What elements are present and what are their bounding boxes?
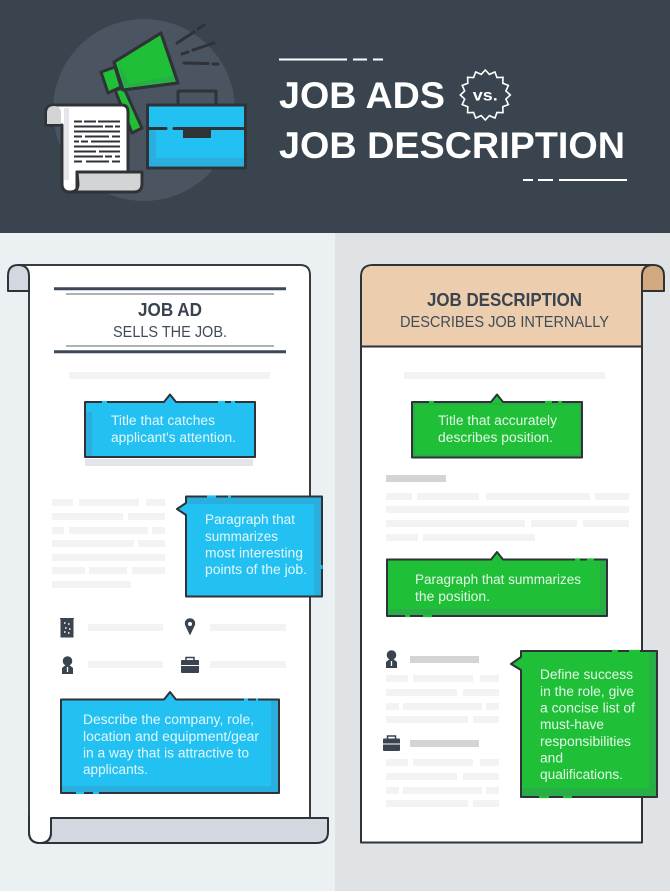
callout: success definition: Define success <box>540 667 633 682</box>
title line 1: JOB ADS <box>279 75 445 116</box>
icon: briefcase <box>148 91 246 168</box>
placeholder paragraph <box>386 475 629 541</box>
scroll sheet <box>361 265 654 842</box>
callout: description: in a way that is attractive to <box>83 746 249 760</box>
header illustration <box>46 19 246 201</box>
callout: title: Title that accurately <box>438 413 557 428</box>
callout: title: applicant's attention. <box>111 430 236 445</box>
header band <box>0 0 670 233</box>
callout: paragraph: points of the job. <box>205 562 307 577</box>
placeholder paragraph <box>52 499 165 588</box>
heading: job ad <box>54 289 286 352</box>
callout: success definition: must-have <box>540 717 604 732</box>
heading: job description: DESCRIBES JOB INTERNALLY <box>400 314 609 331</box>
placeholder section 2 <box>386 740 499 807</box>
placeholder bar <box>210 624 286 631</box>
callout: paragraph <box>177 496 322 596</box>
placeholder bar <box>88 661 163 668</box>
icon: map pin <box>185 618 195 636</box>
callout: success definition: a concise list of <box>540 700 635 716</box>
callout: title <box>412 394 582 458</box>
icon: paper scroll <box>46 105 142 192</box>
callout: title <box>85 394 255 466</box>
placeholder title bar <box>404 372 605 379</box>
callout: success definition: responsibilities <box>540 734 631 749</box>
callout: paragraph: summarizes <box>205 529 278 544</box>
callout: paragraph <box>387 552 607 616</box>
placeholder bar <box>88 624 163 631</box>
panel background: job ad <box>0 233 335 891</box>
rule above title <box>279 58 383 60</box>
callout: title: Title that catches <box>111 413 215 428</box>
panel: job description <box>361 265 664 842</box>
heading: job description <box>400 290 609 331</box>
heading: job description: JOB DESCRIPTION <box>427 290 582 310</box>
callout: paragraph: Paragraph that summarizes <box>415 572 581 587</box>
callout: success definition: and <box>540 750 563 766</box>
scroll top curl <box>8 265 29 291</box>
icon: building <box>60 618 74 637</box>
badge: vs.: vs. <box>473 88 498 105</box>
icon: person <box>386 650 397 668</box>
heading: job ad: JOB AD <box>138 300 202 320</box>
peach heading band <box>362 266 653 346</box>
heading: job ad: SELLS THE JOB. <box>113 324 227 341</box>
scroll bottom roll <box>29 818 328 843</box>
callout: paragraph: Paragraph that <box>205 512 295 527</box>
icon: person <box>62 656 73 674</box>
callout: paragraph: the position. <box>415 589 490 604</box>
panel background: job description <box>335 233 670 891</box>
icon backdrop circle <box>53 19 235 201</box>
placeholder title bar <box>69 372 270 379</box>
panel: job ad <box>8 265 328 843</box>
placeholder bar <box>210 661 286 668</box>
callout: success definition: qualifications. <box>540 767 623 782</box>
callout: description: applicants. <box>83 762 148 777</box>
callout: title: describes position. <box>438 430 553 445</box>
callout: success definition <box>511 651 657 797</box>
title block <box>279 60 627 180</box>
callout: description: location and equipment/gear <box>83 729 260 744</box>
callout: success definition: in the role, give <box>540 684 634 699</box>
scroll top curl <box>642 265 664 291</box>
scroll sheet <box>18 265 310 819</box>
icon: megaphone <box>101 25 218 133</box>
rule below title <box>523 179 627 181</box>
icon: small briefcase <box>181 658 199 673</box>
callout: paragraph: most interesting <box>205 546 303 560</box>
icon: small briefcase <box>383 736 400 751</box>
callout: description: Describe the company, role, <box>83 712 254 727</box>
badge: vs. <box>460 70 510 120</box>
title line 2: JOB DESCRIPTION <box>279 125 625 166</box>
callout: description <box>61 692 279 793</box>
placeholder section 1 <box>386 656 499 723</box>
